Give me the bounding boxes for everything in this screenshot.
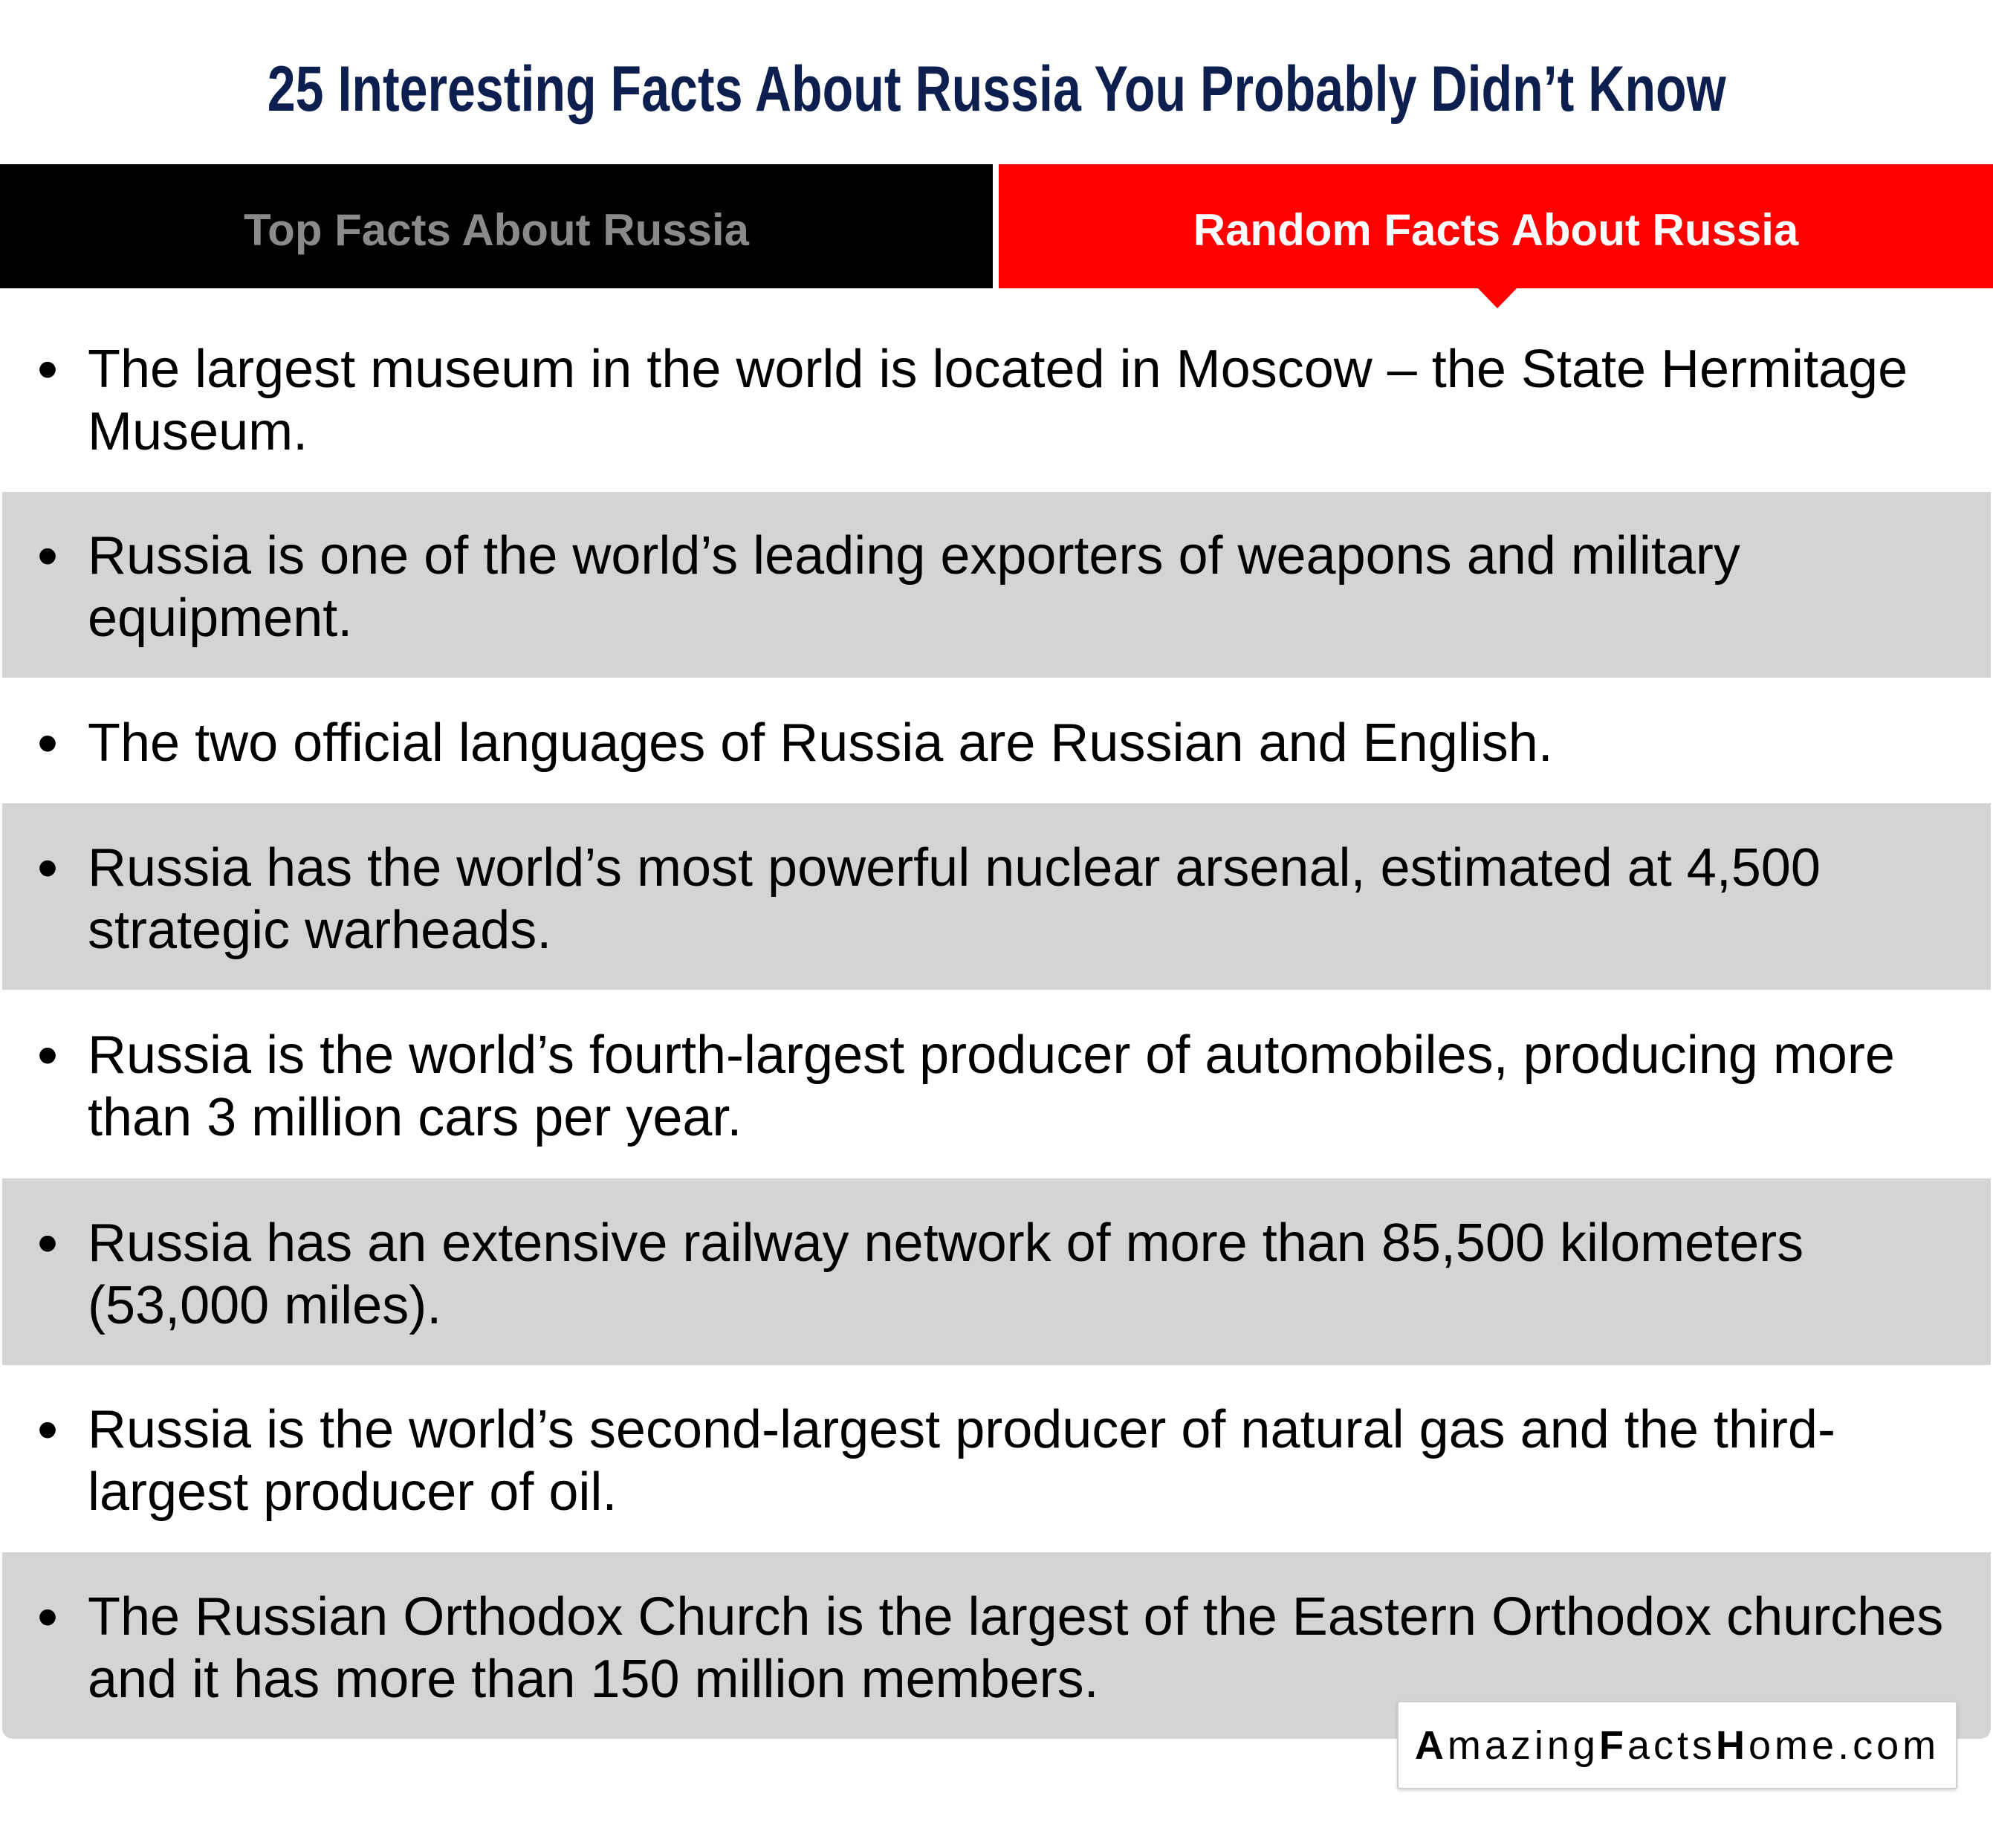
fact 8: •	[37, 1583, 58, 1650]
watermark: AmazingFactsHome.com	[1415, 1722, 1939, 1767]
fact 7: •	[37, 1396, 58, 1462]
fact 3: The two official languages of Russia are Russian and English.	[88, 713, 1553, 773]
fact 6: Russia has an extensive railway network of more than 85,500 kilometers (53,000 miles).	[88, 1213, 1804, 1335]
fact 6	[2, 1178, 1991, 1365]
fact 2: •	[37, 522, 58, 589]
fact 4: Russia has the world’s most powerful nuclear arsenal, estimated at 4,500 strategic warheads.	[88, 838, 1821, 960]
fact 2: Russia is one of the world’s leading exporters of weapons and military equipment.	[88, 526, 1740, 648]
fact 2	[2, 492, 1991, 678]
fact 4: •	[37, 834, 58, 901]
watermark	[1397, 1701, 1957, 1789]
fact 5: Russia is the world’s fourth-largest producer of automobiles, producing more than 3 million cars per year.	[88, 1025, 1895, 1147]
title: 25 Interesting Facts About Russia You Probably Didn’t Know	[268, 54, 1725, 125]
fact 8: The Russian Orthodox Church is the largest of the Eastern Orthodox churches and it has more than 150 million members.	[88, 1587, 1943, 1709]
fact 5: •	[37, 1022, 58, 1088]
tab: random facts	[999, 164, 1993, 288]
tab: top facts: Top Facts About Russia	[244, 205, 749, 255]
fact 4	[2, 803, 1991, 990]
fact 7: Russia is the world’s second-largest producer of natural gas and the third-largest producer of oil.	[88, 1400, 1835, 1522]
active tab pointer	[1477, 288, 1517, 308]
tab: random facts: Random Facts About Russia	[1193, 205, 1798, 255]
fact 8	[2, 1552, 1991, 1739]
tab: top facts	[0, 164, 993, 288]
fact 1: The largest museum in the world is located in Moscow – the State Hermitage Museum.	[88, 340, 1908, 461]
fact 1: •	[37, 336, 58, 402]
fact 6: •	[37, 1210, 58, 1275]
fact 3: •	[37, 709, 58, 776]
